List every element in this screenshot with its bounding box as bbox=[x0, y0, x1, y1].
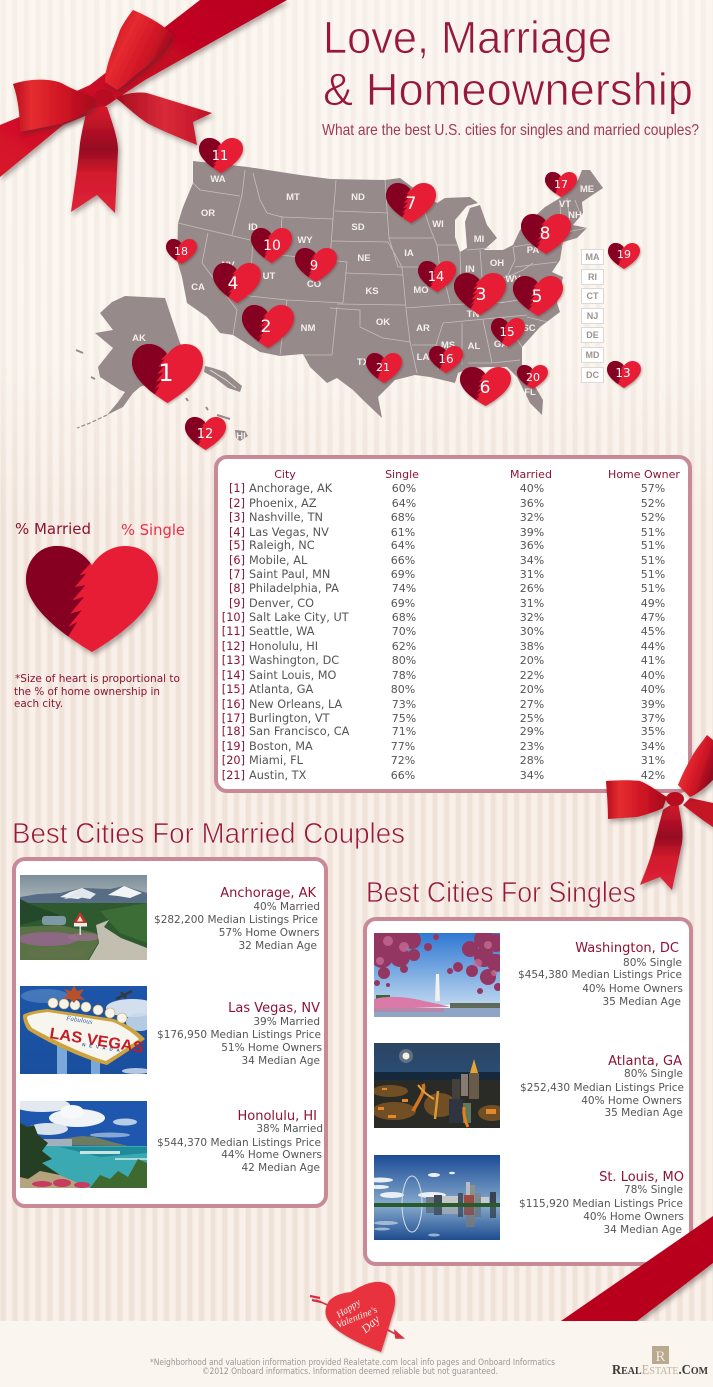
small state key boxes: RI bbox=[588, 272, 597, 282]
heart 6: 6 bbox=[480, 378, 490, 398]
table rows: [13] bbox=[222, 654, 245, 667]
table rows bbox=[222, 482, 665, 782]
heading: best cities for married couples: Best Cities For Married Couples bbox=[12, 818, 405, 850]
table rows: [3] bbox=[229, 511, 245, 524]
data table bbox=[222, 468, 680, 782]
contiguous states bbox=[177, 161, 603, 418]
table rows: 22% bbox=[520, 669, 544, 682]
state abbreviations: UT bbox=[263, 271, 276, 282]
table rows: 32% bbox=[520, 611, 544, 624]
table rows: 51% bbox=[641, 539, 665, 552]
state abbreviations: VT bbox=[559, 199, 571, 210]
table rows: 26% bbox=[520, 582, 544, 595]
city card: Atlanta: Atlanta, GA bbox=[608, 1054, 682, 1069]
table rows: 51% bbox=[641, 568, 665, 581]
table rows: 34% bbox=[520, 554, 544, 567]
heart 21 bbox=[365, 352, 402, 384]
heart 10 bbox=[250, 227, 292, 264]
table rows: [18] bbox=[222, 725, 245, 738]
ribbon bow, right side bbox=[606, 735, 713, 890]
state abbreviations bbox=[132, 174, 594, 442]
table rows: 78% bbox=[392, 669, 416, 682]
heart 16 bbox=[428, 345, 463, 374]
heart 19 bbox=[607, 242, 640, 270]
table rows: 31% bbox=[520, 568, 544, 581]
table rows: Salt Lake City, UT bbox=[249, 611, 349, 624]
footer source note bbox=[150, 1358, 556, 1377]
state abbreviations: CA bbox=[191, 282, 205, 293]
table rows: [7] bbox=[229, 568, 245, 581]
table rows: [11] bbox=[222, 625, 245, 638]
arrow bbox=[310, 1296, 403, 1338]
table rows: Nashville, TN bbox=[249, 511, 323, 524]
heart 11: 11 bbox=[212, 149, 228, 164]
state abbreviations: OK bbox=[376, 317, 390, 328]
city card: Atlanta: 35 Median Age bbox=[604, 1107, 683, 1119]
state abbreviations: AL bbox=[468, 341, 481, 352]
table rows: 47% bbox=[641, 611, 665, 624]
city card: Atlanta bbox=[520, 1054, 684, 1119]
state abbreviations: SC bbox=[522, 323, 536, 334]
heart 20 bbox=[516, 365, 548, 389]
heart 13 bbox=[606, 360, 641, 389]
state abbreviations: WV bbox=[505, 274, 521, 285]
state abbreviations: MT bbox=[286, 192, 300, 203]
logo mark: R bbox=[655, 1349, 666, 1365]
table rows: 74% bbox=[392, 582, 416, 595]
table rows: Honolulu, HI bbox=[249, 640, 318, 653]
heart 18: 18 bbox=[174, 245, 188, 258]
table rows: 40% bbox=[641, 683, 665, 696]
panel: married couples bbox=[14, 859, 326, 1206]
state abbreviations: MS bbox=[441, 340, 455, 351]
state abbreviations: CO bbox=[307, 279, 321, 290]
ribbon band, bottom right bbox=[561, 1216, 713, 1321]
table rows: [17] bbox=[222, 712, 245, 725]
table rows: 42% bbox=[641, 769, 665, 782]
table rows: 36% bbox=[520, 497, 544, 510]
city card: Anchorage: $282,200 Median Listings Price bbox=[154, 914, 318, 926]
heart 9: 9 bbox=[310, 259, 318, 274]
city card: Honolulu: 44% Home Owners bbox=[221, 1149, 322, 1161]
Hawaii bbox=[235, 430, 248, 441]
state abbreviations: TX bbox=[357, 357, 370, 368]
ribbon with bow, top left bbox=[0, 0, 287, 213]
state abbreviations: IA bbox=[404, 248, 414, 259]
table rows: 41% bbox=[641, 654, 665, 667]
heart 1: 1 bbox=[158, 359, 174, 387]
city card: Washington: 80% Single bbox=[623, 957, 682, 969]
state abbreviations: OH bbox=[490, 258, 504, 269]
table rows: 32% bbox=[520, 511, 544, 524]
logo wordmark: REALESTATE.COM bbox=[612, 1363, 709, 1378]
heart 4: 4 bbox=[228, 274, 238, 294]
city card: St. Louis: 34 Median Age bbox=[603, 1224, 682, 1236]
city card: Las Vegas: 51% Home Owners bbox=[221, 1042, 322, 1054]
city card: Washington: Washington, DC bbox=[575, 941, 679, 956]
heart 10: 10 bbox=[263, 238, 281, 254]
heart 8: 8 bbox=[540, 224, 550, 244]
table rows: 52% bbox=[641, 497, 665, 510]
state abbreviations: ME bbox=[580, 184, 594, 195]
heart 13: 13 bbox=[615, 366, 631, 380]
state abbreviations: WA bbox=[210, 174, 226, 185]
heart 5 bbox=[512, 275, 563, 317]
table rows: Miami, FL bbox=[249, 754, 304, 767]
table rows: [6] bbox=[229, 554, 245, 567]
heart 17 bbox=[544, 172, 577, 198]
table rows: 39% bbox=[520, 526, 544, 539]
table rows: 40% bbox=[520, 482, 544, 495]
heart 5: 5 bbox=[532, 287, 542, 307]
city card: Las Vegas bbox=[157, 1001, 322, 1067]
table rows: 34% bbox=[641, 740, 665, 753]
heart 7 bbox=[385, 182, 436, 224]
table rows: 60% bbox=[392, 482, 416, 495]
state abbreviations: AR bbox=[416, 323, 430, 334]
table rows: Burlington, VT bbox=[249, 712, 330, 725]
greeting: Valentine's bbox=[335, 1304, 379, 1331]
table rows: 36% bbox=[520, 539, 544, 552]
city card: Las Vegas: 39% Married bbox=[253, 1016, 320, 1028]
heart 18 bbox=[165, 238, 197, 264]
city card: Las Vegas: Las Vegas, NV bbox=[228, 1001, 320, 1016]
photo: Las Vegas: NEVADA bbox=[82, 1042, 121, 1053]
heart 15: 15 bbox=[499, 325, 515, 339]
state abbreviations: WI bbox=[432, 219, 444, 230]
table rows: 34% bbox=[520, 769, 544, 782]
table rows: 35% bbox=[641, 725, 665, 738]
small state key boxes: DE bbox=[586, 330, 599, 340]
table rows: 77% bbox=[391, 740, 415, 753]
table rows: Boston, MA bbox=[249, 740, 313, 753]
small state key boxes: NJ bbox=[587, 311, 598, 321]
table rows: [20] bbox=[222, 754, 245, 767]
table rows: [19] bbox=[222, 740, 245, 753]
table rows: 27% bbox=[520, 698, 544, 711]
heart 20: 20 bbox=[526, 371, 540, 384]
photo: Washington DC bbox=[374, 933, 500, 1017]
table rows: 70% bbox=[392, 625, 416, 638]
small state key boxes: MD bbox=[586, 350, 600, 360]
table rows: Washington, DC bbox=[249, 654, 339, 667]
city card: Atlanta: 40% Home Owners bbox=[581, 1095, 682, 1107]
state abbreviations: NM bbox=[301, 323, 315, 334]
table rows: 64% bbox=[391, 539, 415, 552]
table rows: 20% bbox=[520, 683, 544, 696]
table rows: [1] bbox=[229, 482, 245, 495]
table rows: New Orleans, LA bbox=[249, 698, 343, 711]
state abbreviations: GA bbox=[494, 339, 508, 350]
table rows: 39% bbox=[641, 698, 665, 711]
greeting bbox=[334, 1297, 383, 1337]
legend note bbox=[14, 673, 180, 710]
table rows: San Francisco, CA bbox=[249, 725, 350, 738]
greeting: Happy bbox=[334, 1297, 363, 1321]
state abbreviations: MO bbox=[413, 285, 429, 296]
state abbreviations: NV bbox=[221, 260, 235, 271]
heart 7: 7 bbox=[406, 194, 416, 214]
state abbreviations: MI bbox=[474, 234, 484, 245]
city card: Atlanta: $252,430 Median Listings Price bbox=[520, 1082, 684, 1094]
city card: Atlanta: 80% Single bbox=[624, 1068, 683, 1080]
table rows: 80% bbox=[391, 683, 415, 696]
small state key boxes bbox=[582, 250, 604, 382]
city card: St. Louis: 40% Home Owners bbox=[583, 1211, 684, 1223]
heart 3: 3 bbox=[476, 285, 486, 305]
state abbreviations: OR bbox=[201, 208, 215, 219]
table rows: Saint Paul, MN bbox=[249, 568, 330, 581]
state abbreviations: WY bbox=[297, 235, 313, 246]
table rows: Raleigh, NC bbox=[249, 539, 315, 552]
legend labels: % Single bbox=[121, 521, 185, 539]
table rows: Atlanta, GA bbox=[249, 683, 313, 696]
city card: Washington: $454,380 Median Listings Price bbox=[518, 969, 682, 981]
table rows: 30% bbox=[520, 625, 544, 638]
city card: Honolulu: 42 Median Age bbox=[241, 1162, 320, 1174]
heart 21: 21 bbox=[376, 361, 390, 374]
table rows: 25% bbox=[520, 712, 544, 725]
city card: Honolulu: Honolulu, HI bbox=[238, 1109, 317, 1124]
state abbreviations: IN bbox=[465, 264, 475, 275]
table rows: 69% bbox=[391, 597, 415, 610]
table rows: 28% bbox=[520, 754, 544, 767]
city card: St. Louis: St. Louis, MO bbox=[599, 1170, 684, 1185]
title bbox=[323, 12, 693, 115]
city card: Las Vegas: $176,950 Median Listings Price bbox=[157, 1029, 321, 1041]
photo: Las Vegas bbox=[20, 986, 147, 1074]
city card: Anchorage: 40% Married bbox=[253, 901, 320, 913]
legend labels: % Married bbox=[15, 520, 91, 538]
heart 4 bbox=[212, 262, 261, 304]
table rows: 20% bbox=[520, 654, 544, 667]
table rows: 72% bbox=[391, 754, 415, 767]
heart 8 bbox=[520, 213, 571, 255]
heart 14 bbox=[417, 260, 456, 293]
photo: Honolulu bbox=[20, 1101, 147, 1188]
legend heart bbox=[24, 544, 158, 654]
table rows: Las Vegas, NV bbox=[249, 526, 329, 539]
table rows: Saint Louis, MO bbox=[249, 669, 337, 682]
city card: Washington: 35 Median Age bbox=[602, 996, 681, 1008]
heart 2 bbox=[241, 304, 294, 349]
table rows: 66% bbox=[391, 769, 415, 782]
table rows: [10] bbox=[222, 611, 245, 624]
heart 19: 19 bbox=[617, 248, 631, 261]
state abbreviations: HI bbox=[236, 431, 246, 442]
city card: Honolulu bbox=[157, 1109, 323, 1174]
table header: Home Owner bbox=[608, 468, 680, 481]
table rows: 66% bbox=[391, 554, 415, 567]
photo: St. Louis bbox=[374, 1155, 500, 1240]
table rows: Philadelphia, PA bbox=[249, 582, 339, 595]
table rows: 80% bbox=[392, 654, 416, 667]
table rows: 37% bbox=[641, 712, 665, 725]
heart 12 bbox=[184, 416, 226, 451]
state abbreviations: LA bbox=[417, 352, 429, 363]
legend note: *Size of heart is proportional to bbox=[15, 673, 180, 685]
city card: Honolulu: $544,370 Median Listings Price bbox=[157, 1137, 321, 1149]
table rows: [21] bbox=[222, 769, 245, 782]
table rows: 61% bbox=[391, 526, 415, 539]
table rows: [4] bbox=[229, 526, 245, 539]
heart 17: 17 bbox=[554, 178, 568, 191]
table rows: [15] bbox=[222, 683, 245, 696]
city card: Anchorage: 57% Home Owners bbox=[219, 927, 320, 939]
table rows: Austin, TX bbox=[249, 769, 307, 782]
small state key boxes: DC bbox=[586, 370, 599, 380]
table rows: 71% bbox=[392, 725, 416, 738]
table rows: [12] bbox=[222, 640, 245, 653]
small state key boxes: MA bbox=[586, 252, 600, 262]
state abbreviations: SD bbox=[351, 222, 365, 233]
table rows: 38% bbox=[520, 640, 544, 653]
heart 2: 2 bbox=[261, 317, 271, 337]
photo: Atlanta bbox=[374, 1043, 500, 1128]
table rows: Seattle, WA bbox=[249, 625, 315, 638]
small state key boxes: CT bbox=[586, 291, 599, 301]
table rows: 75% bbox=[392, 712, 416, 725]
footer source note: ©2012 Onboard informatics. Information deemed reliable but not guaranteed. bbox=[202, 1367, 498, 1377]
state abbreviations: PA bbox=[527, 245, 539, 256]
table rows: [2] bbox=[229, 497, 245, 510]
heart 11 bbox=[198, 137, 243, 174]
table rows: [16] bbox=[222, 698, 245, 711]
table rows: 51% bbox=[641, 526, 665, 539]
heading: best cities for singles: Best Cities For Singles bbox=[366, 877, 636, 909]
table rows: 23% bbox=[520, 740, 544, 753]
table rows: 31% bbox=[641, 754, 665, 767]
photo: Las Vegas: LAS VEGAS bbox=[48, 1025, 145, 1057]
state abbreviations: AK bbox=[132, 333, 146, 344]
RealEstate.com logo bbox=[612, 1346, 709, 1378]
Happy Valentine's Day heart with arrow bbox=[310, 1282, 403, 1352]
table rows: 40% bbox=[641, 669, 665, 682]
table rows: 62% bbox=[392, 640, 416, 653]
table rows: [8] bbox=[229, 582, 245, 595]
table rows: 49% bbox=[641, 597, 665, 610]
footer source note: *Neighborhood and valuation information provided Realetate.com local info pages and Onboard Informatics bbox=[150, 1358, 556, 1368]
legend note: the % of home ownership in bbox=[14, 686, 160, 698]
table rows: 64% bbox=[392, 497, 416, 510]
greeting: Day bbox=[357, 1312, 383, 1337]
table rows: 44% bbox=[641, 640, 665, 653]
heart 6 bbox=[459, 366, 511, 407]
state abbreviations: FL bbox=[524, 387, 536, 398]
table rows: 45% bbox=[641, 625, 665, 638]
table rows: 68% bbox=[392, 611, 416, 624]
footer band overlap to cut ribbon shadow bbox=[480, 1321, 713, 1329]
city card: St. Louis: 78% Single bbox=[624, 1184, 683, 1196]
city card: St. Louis bbox=[519, 1170, 684, 1236]
table rows: 31% bbox=[520, 597, 544, 610]
table rows: 29% bbox=[520, 725, 544, 738]
city card: Anchorage: 32 Median Age bbox=[238, 940, 317, 952]
table rows: 69% bbox=[391, 568, 415, 581]
city card: Anchorage bbox=[154, 886, 320, 952]
legend: married versus single heart bbox=[14, 520, 185, 710]
table header: Married bbox=[510, 468, 552, 481]
city card: Honolulu: 38% Married bbox=[256, 1123, 323, 1135]
state abbreviations: NE bbox=[357, 253, 371, 264]
state abbreviations: KS bbox=[365, 286, 379, 297]
heart 3 bbox=[453, 272, 506, 316]
state abbreviations: ID bbox=[248, 222, 258, 233]
table rows: [9] bbox=[229, 597, 245, 610]
state abbreviations: ND bbox=[351, 192, 365, 203]
table rows: [5] bbox=[229, 539, 245, 552]
table rows: Anchorage, AK bbox=[249, 482, 333, 495]
panel: singles bbox=[365, 919, 691, 1264]
city card: Washington: 40% Home Owners bbox=[582, 983, 683, 995]
table rows: Phoenix, AZ bbox=[249, 497, 317, 510]
table rows: Mobile, AL bbox=[249, 554, 308, 567]
panel: city data table bbox=[216, 457, 690, 791]
table header bbox=[274, 468, 680, 481]
table rows: 73% bbox=[392, 698, 416, 711]
map of the United States bbox=[76, 161, 603, 442]
table header: City bbox=[274, 468, 296, 481]
legend note: each city. bbox=[14, 698, 63, 710]
legend labels bbox=[15, 520, 185, 539]
heart 1 bbox=[131, 343, 203, 404]
table rows: 68% bbox=[391, 511, 415, 524]
state abbreviations: NH bbox=[568, 210, 582, 221]
table rows: 52% bbox=[641, 511, 665, 524]
heart 16: 16 bbox=[438, 352, 454, 366]
state abbreviations: TN bbox=[467, 309, 479, 320]
table rows: 51% bbox=[641, 554, 665, 567]
heart 12: 12 bbox=[197, 427, 213, 442]
table rows: 51% bbox=[641, 582, 665, 595]
heart 15 bbox=[490, 317, 525, 348]
photo: Anchorage bbox=[20, 875, 147, 960]
state borders bbox=[178, 170, 587, 373]
city card: St. Louis: $115,920 Median Listings Price bbox=[519, 1198, 683, 1210]
city card: Anchorage: Anchorage, AK bbox=[220, 886, 316, 901]
footer band bbox=[0, 1321, 713, 1387]
table rows: 57% bbox=[641, 482, 665, 495]
heart 14: 14 bbox=[428, 270, 444, 285]
heart 9 bbox=[294, 247, 337, 283]
title: Love, Marriage bbox=[323, 12, 612, 63]
city card: Las Vegas: 34 Median Age bbox=[241, 1055, 320, 1067]
table rows: Denver, CO bbox=[249, 597, 314, 610]
Alaska bbox=[95, 296, 192, 415]
table header: Single bbox=[385, 468, 419, 481]
photo: Las Vegas: Fabulous bbox=[65, 1014, 93, 1026]
table rows: [14] bbox=[222, 669, 245, 682]
title: & Homeownership bbox=[323, 64, 693, 115]
city card: Washington bbox=[518, 941, 683, 1008]
heart bbox=[325, 1282, 395, 1352]
